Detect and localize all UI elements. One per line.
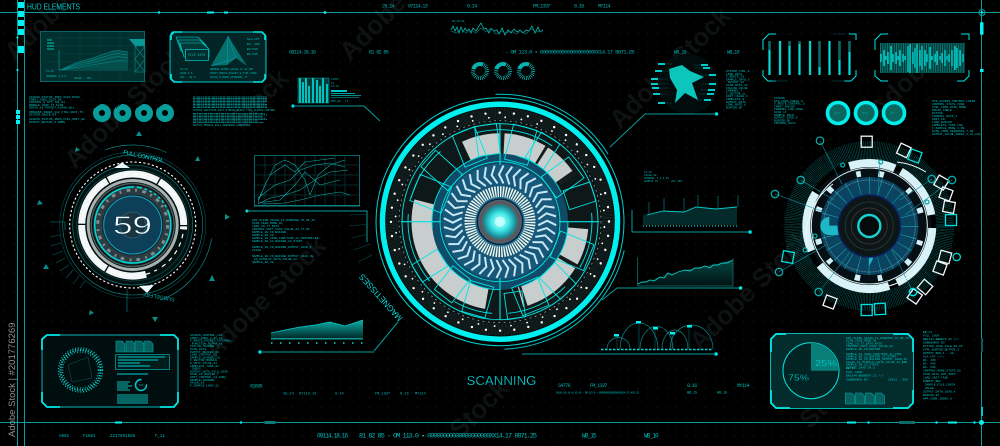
- text block: center notes: OUTPUT_MODULE_9911_SEQUENCE_CONFIRMED: [193, 124, 251, 127]
- top data readouts: WB_10: [727, 50, 740, 56]
- bottom data readouts: MY114: [737, 383, 750, 389]
- text block: left of status circles: SAMPLE_INFO: [774, 114, 794, 117]
- text block: panel side notes: LOAD_CONTROL_12: [190, 354, 217, 357]
- panel: level bars: [763, 34, 856, 81]
- text block: code lines: SAMPLE_90_IN_BUFFER_OUTPUT_LOAD_CH: [252, 255, 313, 258]
- panel: pyramid and stacked cards: II-19: [180, 68, 188, 71]
- radar star chart: [610, 54, 718, 147]
- text block: left notes: OUTPUT_BUFFER_3 NODE: [29, 121, 65, 124]
- area chart right upper: II-19: [644, 171, 652, 174]
- panel: pyramid and stacked cards: B2-64%: [247, 48, 258, 51]
- bottom data readouts: S4770: [558, 383, 571, 389]
- watermark: Adobe Stock: [603, 0, 737, 134]
- text block: far right notes: BB1144 BBBB76.22 ///: [923, 337, 959, 341]
- label: SCANNING: SCANNING: [466, 374, 536, 388]
- bottom data readouts: 09114.18.16: [317, 432, 349, 440]
- text block: panel side notes: SAMPLE_CHANNEL_11: [190, 356, 221, 359]
- text block: left notes: SYSTEM_CHECK_04: [29, 114, 56, 117]
- text block: code lines: SCAN_VIEW_MODE_01: [252, 222, 283, 225]
- text block: code lines: SAMPLE_88_22: [252, 234, 274, 237]
- text block: code lines: APP_SLIDE_VALUE_11_RUNNING_76_OK_22: [252, 219, 315, 222]
- text block: right of status circles: OUTPUT_VALUE_INDEX_1_33_FULL: [932, 133, 983, 136]
- top data readouts: 25_14: [382, 4, 395, 10]
- text block: panel side notes: OUTPUT_BUFFER_99: [190, 351, 219, 354]
- inner tick ring: [470, 192, 530, 252]
- top data readouts: - OM 113.0 ▪ 00000000000000000000XX14.17 8871.25: [505, 50, 635, 56]
- panel: pie 25 / 75: VALUE_22_DISPLAY_DATA_VALUE_22_END: [846, 361, 907, 364]
- label: subsystem: SUBSELFAY: [142, 290, 175, 302]
- status circles: DATA: [862, 112, 869, 115]
- text block: code lines: SAMPLE_88_IN_BUFFER: [252, 231, 286, 234]
- text block: right of status circles: CONTROL_STATE_CODE: [932, 103, 965, 106]
- text block: panel side notes: S_UNIT_VALUE_33: [190, 362, 217, 365]
- text block: radar notes: LOAD_DATA: [726, 73, 742, 76]
- text block: panel side notes: FUNCTION_ALPHA_88: [190, 342, 223, 345]
- donut icons: [95, 104, 171, 119]
- panel: pyramid and stacked cards: B1- 15%: [247, 43, 260, 46]
- text block: left notes: MODULE_LOAD_77 SCAN: [29, 104, 63, 107]
- right eye gauge: [771, 136, 960, 316]
- area chart right lower: [602, 257, 742, 300]
- text block: left of status circles: ACCESS: [774, 97, 785, 100]
- text block: radar notes: CHANNEL_7: [726, 90, 742, 93]
- top data readouts: FM_1337: [533, 4, 550, 10]
- bottom data readouts: F1681: [83, 435, 96, 439]
- panel: pyramid and stacked cards: FILE 4476: [188, 53, 205, 57]
- text block: radar notes: UNIT_VALUE_3: [726, 95, 748, 98]
- bottom data readouts: F_11: [155, 435, 166, 439]
- top data readouts: [289, 4, 740, 56]
- area chart right upper: VAL 15%: [671, 180, 682, 183]
- text block: radar notes: OUTPUT_DATA: [726, 101, 746, 104]
- text block: far right notes: BB-14: [923, 331, 932, 334]
- vertical stock id: Adobe Stock | #201776269: [7, 323, 18, 437]
- watermark: Adobe Stock: [58, 40, 192, 174]
- text block: code lines: SAMPLE_88_VIEW_FUNCTION_11_CONTROLLER: [252, 237, 319, 240]
- watermark: Stock: [443, 373, 515, 444]
- text block: radar notes: F_ROUTE_CH: [726, 76, 744, 79]
- bottom data readouts: 0.16: [400, 392, 409, 396]
- text block: radar notes: LOAD_RATE_8: [726, 104, 746, 107]
- text block: panel side notes: F_SECTOR_MODULE: [190, 359, 217, 362]
- grey segments: [396, 118, 604, 325]
- text block: right of status circles: SYS_ACCESS_CONTROL_LOGIN: [932, 100, 975, 103]
- panel: area chart top left: CHANNEL 1_3_5: [46, 75, 67, 78]
- line chart grid: [246, 156, 367, 242]
- gauge value 59: 59: [113, 212, 152, 240]
- text block: radar notes: SCAN_DATA_44: [726, 84, 748, 87]
- left gauge: [30, 122, 235, 328]
- text block: panel side notes: VALUE_19: [190, 382, 205, 385]
- top data readouts: 0.16: [574, 4, 584, 10]
- text block: right of status circles: F_SAMPLE_MODE_3_OK: [932, 127, 965, 130]
- watermark: Adobe Stock: [683, 222, 817, 356]
- text block: code lines: SAMPLE_90_IN_BUFFER_OUTPUT_LOAD_3: [252, 246, 312, 249]
- text block: code lines: LOAD_CH_77_DATA: [252, 225, 279, 228]
- panel: pie 25 / 75: SCAN_VIEW_MODE_01: [846, 340, 877, 343]
- bottom data readouts: FM_1337: [590, 383, 607, 389]
- panel: pie 25 / 75: 25611 - 99%: [888, 378, 908, 381]
- area chart right upper: VALUE_88: [644, 174, 657, 177]
- bottom data readouts: WB_15: [687, 392, 697, 396]
- text block: far right notes: B3- 54%: [923, 366, 936, 369]
- text block: far right notes: APP_CODE_INDEX_9: [923, 398, 952, 400]
- text block: panel side notes: F_SAMPLE_LOAD_22: [190, 384, 219, 387]
- bottom data readouts: WB_10: [644, 432, 659, 440]
- bar chart top center: [291, 78, 380, 121]
- text block: panel side notes: SCAN_DATA: [190, 348, 206, 351]
- watermark: Stock: [793, 363, 865, 434]
- text block: panel side notes: COMPLETE_TASK_91: [190, 365, 219, 368]
- top data readouts: 81 82 85: [369, 50, 389, 56]
- watermark: Adobe: [863, 46, 941, 124]
- text block: far right notes: FULL 100%: [923, 334, 939, 338]
- orbit squares: [782, 136, 956, 316]
- panel: frequency bars: [875, 34, 969, 81]
- panel: pyramid and stacked cards: INPUT_ROUTE_PACKET_9_CTRL_CODE: [210, 72, 257, 75]
- panel: pie 25 / 75: SAMPLE_90_IN_BUFFER_OUTPUT_LOAD_33: [846, 358, 907, 361]
- text block: panel side notes: UNIT_CONTROL_44_FUNC: [190, 376, 226, 379]
- text block: right of status circles: LOAD_BUFFER: [932, 121, 952, 124]
- bottom data readouts: 09114.18.16 81 82 85 - OM 113.0 ▪ 00000000000000000XX14.17 8871.25: [556, 392, 640, 394]
- bar chart top center: 85%_04 - 17: [331, 100, 349, 103]
- area chart right upper: CHANNEL 1_3_5_01: [644, 177, 669, 180]
- text block: far right notes: BUFFER_22: [923, 394, 939, 397]
- rotated label: MAGNETISSES: [357, 272, 404, 323]
- text block: radar notes: SYSTEM_CTRL_9: [726, 70, 750, 73]
- text block: left of status circles: CONTROL_DATA: [774, 122, 796, 125]
- bottom data readouts: 2217891555: [110, 435, 136, 439]
- panel: pie 25 / 75: BB1144 BBBBB76.22 ///: [846, 374, 884, 378]
- panel: pyramid and stacked cards: RENDER_SCOPE_ALPHA_11_22_OUT: [210, 68, 254, 71]
- area chart right upper: SAMPLE 45: [644, 180, 658, 183]
- text block: far right notes: B1- 33%: [923, 359, 936, 362]
- text block: center notes: SYSTEM_ANALYSIS_DATA_STREAM_BLOCK_7731_ACCESS_CONTROL: [193, 109, 276, 112]
- area chart right upper: [632, 171, 752, 234]
- status circles: DATA: [834, 112, 841, 115]
- connector and chart bottom left: [258, 320, 374, 354]
- text block: left of status circles: BUFFER_OK: [774, 119, 790, 122]
- text block: far right notes: CTRL_BUFFER_OUTPUT_3: [923, 348, 959, 352]
- text block: panel side notes: INDEX: [190, 368, 201, 371]
- text block: right of status circles: SCAN_CODE_SEQUENCE_7_OK: [932, 130, 974, 133]
- text block: left of status circles: CHANNEL_LOG_CODE: [774, 108, 803, 111]
- text block: panel side notes: F_ROUTE_PACKET_INTERNAL: [190, 340, 232, 343]
- waveform: [451, 20, 543, 35]
- text block: far right notes: CONTROL_MODE_STATE_01: [923, 370, 961, 372]
- panel: pyramid and stacked cards: CHAN.3.5: [180, 72, 193, 75]
- text block: panel side notes: INPUT_CODE_3_OK_22: [190, 337, 223, 340]
- text block: far right notes: SUBBBHBCH B3: [923, 342, 945, 344]
- top data readouts: MY114: [598, 4, 611, 10]
- panel: area chart top left: [40, 32, 145, 82]
- text block: far right notes: OUTPUT_DATA_LOAD_8: [923, 390, 956, 394]
- text block: code lines: CONTROL_UNIT_FUNC_VALUE_28_77_OK: [252, 228, 310, 231]
- triangles around gauge: [37, 131, 230, 322]
- text block: radar notes: F_SECTOR_11: [726, 92, 746, 95]
- text block: far right notes: SUBMIT_REF: [923, 380, 941, 383]
- bottom data readouts: 0.14: [335, 392, 344, 396]
- text block: left of status circles: INPUT_PACKET: [774, 105, 796, 108]
- text block: far right notes: LOAD_UNIT_TASK: [923, 376, 948, 380]
- panel: pyramid and stacked cards: SCALE_5_MODE_INTERNAL_77: [210, 76, 248, 79]
- text block: panel side notes: SCAN_22_BUFFER_7: [190, 373, 219, 376]
- text block: left of status circles: SCAN_17: [774, 111, 787, 114]
- panel: pie 25 / 75: SAMPLE_88_VIEW_FUNCTION_11_CTRL: [846, 353, 902, 356]
- bottom data readouts: A002: [59, 435, 70, 439]
- panel: pyramid and stacked cards: [170, 32, 266, 82]
- top data readouts: 07114.13: [408, 4, 428, 10]
- text block: left of status circles: OUTPUT_CODE_9: [774, 117, 798, 120]
- text block: left notes: INPUT_CODE_3124_OK: [29, 99, 62, 102]
- panel: pie 25 / 75: SUBBBHBCH B3: [846, 378, 868, 381]
- spinner icons: [471, 62, 535, 80]
- panel: pie 25 / 75: CONTROL_UNIT_FUNC_VALUE_28: [846, 345, 893, 348]
- panel: area chart top left: VALUE - 15%: [74, 77, 92, 80]
- bottom data readouts: WB_15: [582, 432, 597, 440]
- text block: code lines: SAMPLE_90_22: [252, 261, 274, 264]
- text block: radar notes: OUTPUT_22: [726, 81, 744, 84]
- bottom data readouts: [59, 383, 750, 440]
- bottom data readouts: WB_10: [717, 392, 727, 396]
- chevron ring: [435, 157, 565, 287]
- text block: right of status circles: ROUTE_TABLE: [932, 109, 952, 112]
- bottom data readouts: 0.16: [687, 383, 697, 389]
- text block: right of status circles: STATUS: [932, 112, 943, 115]
- text block: panel side notes: SAMPLE_CHANNEL: [190, 379, 215, 382]
- bottom data readouts: 81695: [250, 384, 263, 390]
- label: FULL CONTROL: FULL CONTROL: [123, 150, 165, 165]
- text block: far right notes: B2- 64%: [923, 362, 936, 366]
- bottom data readouts: FM_1337: [375, 392, 390, 396]
- main scanner gauge: [350, 90, 632, 354]
- panel: dot ring and documents: 72%: [138, 384, 144, 387]
- panel: pie 25 / 75: APP_SLIDE_VALUE_11_RUNNING_76_OK_22: [846, 337, 909, 340]
- watermark: Adobe Stock: [198, 230, 332, 364]
- bottom data readouts: 81 82 85 - OM 113.0 ▪ 00000000000000000000XX14.17 8871.25: [359, 432, 537, 440]
- text block: far right notes: OUTPUT_RUN_1 - 88: [923, 352, 954, 355]
- bar chart top center: LIMIT: [331, 78, 339, 81]
- text block: panel side notes: ACCESS_CONTROL_LOG: [190, 334, 223, 337]
- pie chart: 25%: [815, 358, 838, 368]
- text block: code lines: 22_DISPLAY_DATA_VALUE_22: [252, 258, 297, 261]
- status circles: 37%: [890, 112, 895, 115]
- bottom data readouts: 25_14: [283, 392, 294, 396]
- text block: far right notes: SYSTEM_LOAD_FILE_88.22: [923, 345, 963, 348]
- text block: radar notes: BUFFER_OK: [726, 106, 742, 109]
- top data readouts: WB_15: [674, 50, 687, 56]
- panel: pie 25 / 75: SAMPLE_90_22_BUFFER_22_START: [846, 356, 897, 358]
- top data readouts: 09114.18.16: [289, 50, 316, 56]
- panel: dot ring and documents: [42, 335, 178, 407]
- text block: left notes: PROCESS_INDEX_112_CTRL_UNIT_75: [29, 111, 83, 114]
- panel: pyramid and stacked cards: SLA-CP7: [247, 38, 260, 41]
- text block: radar notes: COMPLETE_0: [726, 98, 744, 101]
- panel: pyramid and stacked cards: VAL - 88 %: [180, 76, 196, 79]
- text block: right of status circles: CHANNEL_DATA_3: [932, 115, 957, 118]
- watermark: Stock: [223, 63, 295, 134]
- text block: panel side notes: FOLLOW_CHANNEL_1: [190, 345, 219, 348]
- text block: radar notes: FOLLOW_VALUE: [726, 87, 748, 90]
- panel: pie 25 / 75: SAMPLE_90_22_STATE: [846, 364, 879, 367]
- text block: right of status circles: COMPLETE_TASK_LOG: [932, 124, 963, 127]
- text block: far right notes: SLA-CP7 ////: [923, 354, 945, 358]
- text block: radar notes: SAMPLE_INFO_3: [726, 78, 750, 81]
- status circles: [828, 102, 904, 124]
- text block: left notes: ACCESS_STATUS_INFO_CTRL_UNIT_92: [29, 118, 85, 121]
- text block: far right notes: SCAN_DATA_OUT_INFO: [923, 373, 956, 376]
- text block: left of status circles: F_ROUTE_CONTROL_3: [774, 103, 805, 106]
- text block: right of status circles: UNIT_ID: [932, 118, 945, 121]
- waveform: 00:15:00: [452, 20, 465, 23]
- panel: pie 25 / 75: LOAD_CH_77_DATA_RATE: [846, 342, 882, 345]
- reactor core: [476, 198, 524, 246]
- text block: code lines: VALUE: [252, 249, 261, 252]
- top data readouts: 0.14: [467, 4, 477, 10]
- bottom data readouts: 07114.13: [299, 392, 316, 396]
- text block: code lines: SAMPLE_90_22_BUFFER_22_START: [252, 240, 303, 243]
- pie chart: 75%: [788, 372, 810, 382]
- text block: left of status circles: SYS_LOAD_CHECK_8: [774, 100, 803, 103]
- text block: left notes: ROUTE_16 PACKET_ALPHA_881: [29, 106, 74, 109]
- panel: pie 25 / 75: OUTPUT_LOAD_CH_3: [846, 366, 875, 369]
- pie chart: [783, 343, 839, 399]
- text block: left notes: ACCESS_STATUS_INFO_0122_MAIN: [29, 96, 80, 99]
- cyan bracket overlay: [401, 123, 599, 320]
- text block: left notes: CONTROL_9 SYS_TAG_01: [29, 101, 65, 104]
- panel: area chart top left: II-19: [46, 70, 54, 73]
- semicircle chart: [522, 321, 718, 356]
- text block: far right notes: SAMPLE_FILE_CHECK: [923, 384, 956, 386]
- panel: pie 25 / 75: BB-14: [846, 367, 855, 370]
- text block: far right notes: VALUE: [923, 387, 934, 390]
- bottom data readouts: MY114: [415, 392, 426, 396]
- text block: right of status circles: CTRL_INFO_RATE_MODE: [932, 106, 966, 109]
- panel: pie 25 / 75: FULL 100%: [846, 371, 862, 374]
- orbit nodes: [771, 137, 960, 296]
- bar chart top center: II-CP: [331, 85, 339, 88]
- panel: pie 25 / 75: [770, 334, 914, 408]
- panel: pie 25 / 75: SAMPLE_88_IN_BUFFER: [846, 348, 880, 351]
- bar chart top center: II: [331, 82, 335, 85]
- panel: pyramid and stacked cards: B3-54%: [247, 53, 258, 56]
- text block: center notes: [193, 97, 276, 127]
- title: HUD ELEMENTS: HUD ELEMENTS: [27, 2, 80, 12]
- outer rings: [368, 90, 632, 354]
- text block: panel side notes: OUTPUT_DATA_FILE_LOAD: [190, 370, 228, 373]
